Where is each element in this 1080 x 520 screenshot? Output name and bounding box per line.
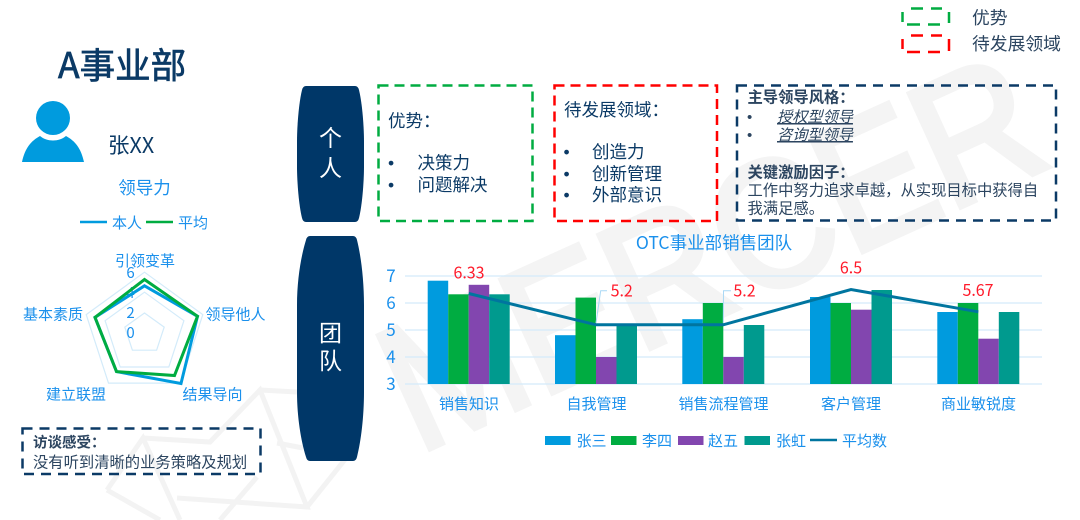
- panel: strengths: 问题解决: [418, 172, 488, 197]
- category labels: 销售知识: [439, 393, 499, 414]
- data labels: 5.2: [611, 278, 633, 302]
- data labels: 6.33: [453, 260, 485, 284]
- bars: 销售流程管理: [682, 303, 764, 384]
- bars: 客户管理: [810, 290, 892, 384]
- panel: development areas: 创新管理: [592, 161, 662, 186]
- radar axis ticks: 0: [126, 322, 135, 343]
- panel: strengths: 优势：: [388, 108, 440, 133]
- panel: strengths: [378, 86, 532, 221]
- panel: development areas: 待发展领域：: [564, 97, 669, 122]
- y axis: [386, 262, 396, 395]
- radar legend: 本人: [112, 212, 142, 233]
- panel: leadership style: 关键激励因子：: [748, 160, 855, 182]
- panel: team bar chart: [386, 230, 1042, 451]
- radar axis ticks: 6: [126, 262, 135, 283]
- chart legend: [545, 430, 887, 451]
- callout: interview: 没有听到清晰的业务策略及规划: [33, 450, 247, 472]
- average line: [469, 290, 978, 325]
- chart legend: 平均数: [842, 430, 887, 451]
- panel: leadership style: •: [747, 109, 752, 126]
- panel: development areas: •: [564, 164, 570, 184]
- category labels: [439, 393, 1016, 414]
- panel: strengths: 决策力: [418, 150, 470, 175]
- panel: leadership style: 我满足感。: [748, 196, 824, 218]
- chart legend: 张三: [576, 430, 607, 451]
- radar labels: 引领变革: [115, 250, 175, 271]
- callout: interview: [22, 428, 260, 474]
- chart legend: 赵五: [708, 430, 738, 451]
- y axis: 5: [386, 316, 396, 341]
- category labels: 销售流程管理: [678, 393, 769, 414]
- radar labels: 领导他人: [206, 304, 266, 324]
- data labels: 5.67: [962, 277, 994, 301]
- panel: leadership style: [737, 86, 1056, 220]
- radar series: self: [95, 286, 198, 384]
- y axis: 4: [386, 343, 396, 368]
- pill: team: [297, 236, 364, 461]
- y axis: 7: [386, 262, 396, 287]
- pill: team: 队: [319, 342, 342, 376]
- y axis: 3: [386, 370, 396, 395]
- radar labels: [23, 250, 266, 404]
- panel: strengths: •: [388, 153, 394, 173]
- category labels: 自我管理: [566, 393, 627, 414]
- radar labels: 基本素质: [23, 304, 83, 324]
- radar axis ticks: 2: [126, 302, 135, 323]
- data labels: 6.5: [840, 254, 862, 278]
- pill: individual: 个: [319, 119, 342, 153]
- category labels: 商业敏锐度: [941, 393, 1016, 414]
- panel: leadership style: 主导领导风格：: [748, 86, 855, 108]
- bars: 商业敏锐度: [937, 303, 1019, 384]
- panel: development areas: [554, 86, 717, 221]
- radar grid: [86, 272, 203, 383]
- panel: strengths: •: [388, 175, 394, 195]
- panel: leadership style: •: [747, 127, 752, 144]
- radar labels: 建立联盟: [46, 384, 106, 404]
- panel: leadership style: 工作中努力追求卓越，从实现目标中获得自: [748, 178, 1038, 200]
- title: A事业部: [58, 38, 186, 89]
- pill: team: 团: [319, 314, 342, 348]
- chart legend: 张虹: [776, 430, 806, 451]
- panel: leadership style: 咨询型领导: [777, 123, 854, 145]
- legend: box colours: 优势: [972, 4, 1008, 30]
- chart legend: 李四: [642, 430, 672, 451]
- radar legend: [80, 212, 208, 233]
- legend: box colours: 待发展领域: [972, 30, 1061, 56]
- panel: development areas: •: [564, 142, 570, 162]
- panel: leadership style: 授权型领导: [777, 105, 854, 127]
- y axis: 6: [386, 289, 396, 314]
- callout: interview: 访谈感受：: [33, 432, 106, 452]
- icon: person: [22, 101, 84, 162]
- bars: 销售知识: [428, 281, 510, 384]
- radar axis ticks: [126, 262, 135, 343]
- panel: leadership radar: [23, 175, 266, 404]
- radar series: average: [95, 280, 198, 376]
- data labels: [453, 254, 994, 302]
- radar axis ticks: 4: [126, 282, 135, 303]
- data labels: 5.2: [733, 278, 756, 302]
- data label leaders: [596, 291, 731, 323]
- pill: individual: [297, 86, 364, 222]
- panel: development areas: 外部意识: [592, 182, 662, 207]
- category labels: 客户管理: [821, 393, 881, 414]
- panel: development areas: •: [564, 185, 570, 205]
- radar labels: 结果导向: [182, 384, 243, 404]
- radar heading: 领导力: [118, 175, 171, 200]
- bars: 自我管理: [555, 298, 637, 384]
- panel: development areas: 创造力: [592, 139, 644, 164]
- pill: individual: 人: [319, 149, 342, 183]
- legend: box colours: [902, 4, 1061, 56]
- person name: 张XX: [108, 129, 154, 160]
- radar legend: 平均: [178, 212, 208, 233]
- chart title: OTC事业部销售团队: [636, 230, 793, 255]
